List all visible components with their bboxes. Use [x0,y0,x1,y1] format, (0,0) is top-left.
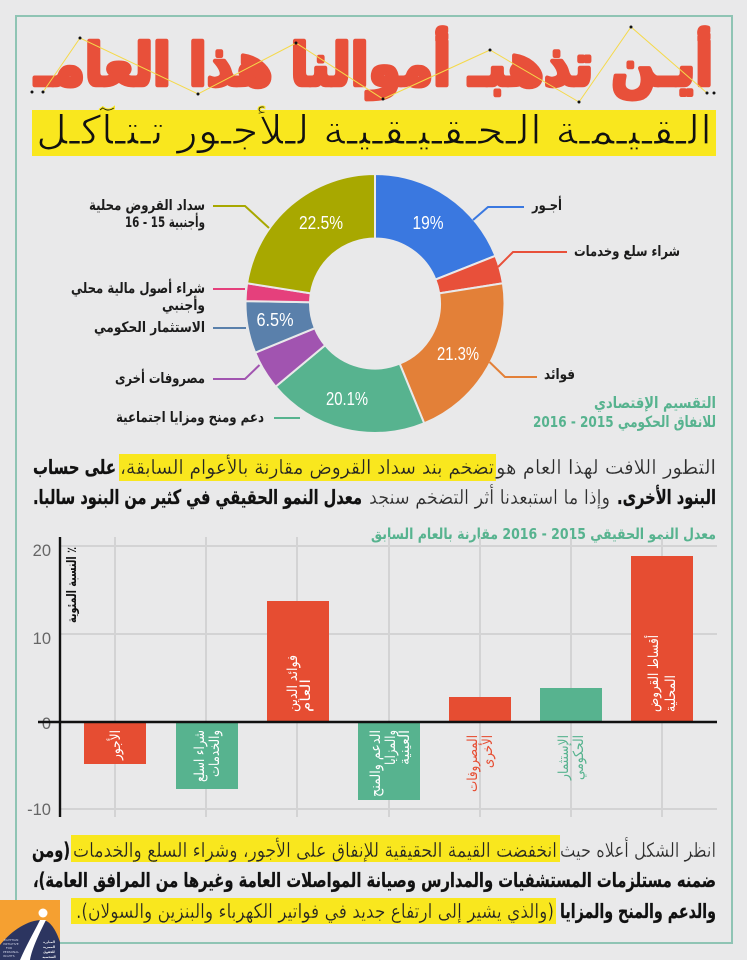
bar labels: والخدمات [207,730,223,777]
logo text: PERSONAL [3,950,19,954]
donut caption: التقسيم الإقتصادي [594,394,716,413]
bar labels: الإستثمار [556,735,572,781]
paragraph: debt repayment growth: معدل النمو الحقيقي في كثير من البنود سالبا. [33,485,362,510]
leader lines [213,206,567,418]
donut percentages: 22.5% [299,213,343,233]
y axis labels: 10 [33,630,51,648]
y axis labels [27,542,51,819]
logo text: RIGHTS [3,954,15,958]
logo text: المبادرة [43,940,55,944]
bar labels: العينية [397,730,413,765]
segment: interest [400,283,505,423]
donut percentages: 19% [412,213,444,233]
bar labels: أقساط القروض [644,635,662,712]
y axis labels: 0 [42,715,51,733]
donut labels [71,196,680,426]
paragraph: real spending decline: (والذي يشير إلى ارتفاع جديد في فواتير الكهرباء والبنزين والسولان). [76,899,554,924]
logo text: الشخصية [42,955,56,959]
segment: subsidies [276,345,424,433]
bar: other expenses [449,697,511,722]
donut labels: مصروفات أخرى [115,369,205,387]
bar: subsidies [358,722,420,800]
bar labels: الأخرى [478,735,496,768]
paragraph: real spending decline [32,835,716,924]
title decoration: line with dots [30,26,716,104]
bar: investment [540,688,602,722]
donut labels: الاستثمار الحكومي [94,320,205,336]
y axis labels: -10 [27,801,51,819]
logo text: INITIATIVE [3,942,19,946]
logo [0,900,60,960]
y axis title: ٪ النسبة المئوية [65,547,80,623]
paragraph: real spending decline: (ومن [32,838,70,862]
bar labels: الحكومي [571,735,587,780]
bar chart [27,537,717,819]
donut labels: شراء أصول مالية محلي [71,279,205,297]
donut labels: دعم ومنح ومزايا اجتماعية [116,410,264,426]
bar: wages [84,722,146,764]
donut percentages [256,213,479,409]
bar labels: فوائد الدين [285,655,301,712]
paragraph: debt repayment growth: التطور اللافت لهذا العام هو [495,455,716,479]
donut labels: فوائد [544,367,575,383]
paragraph: real spending decline: انظر الشكل أعلاه حيث [560,837,716,862]
donut chart [246,174,505,433]
bar labels [106,635,679,797]
donut percentages: 6.5% [256,310,294,330]
axes [38,537,717,817]
bar: domestic loan installments [631,556,693,722]
donut percentages: 21.3% [437,344,479,364]
bar labels: الأجور [106,730,124,761]
paragraph: real spending decline: انخفضت القيمة الحقيقية للإنفاق على الأجور، وشراء السلع والخدمات [73,838,557,862]
bar: debt interest [267,601,329,722]
bar labels: العام [298,679,314,712]
segment: debt repayment [247,174,375,293]
logo text: FOR [6,946,12,950]
bar labels: الدعم والمنح [368,730,384,797]
bar: goods and services [176,722,238,789]
logo text: للحقوق [43,950,55,954]
paragraph: debt repayment growth [33,454,716,510]
donut labels: أجـور [531,196,562,214]
paragraph: debt repayment growth: على حساب [33,455,116,479]
bar labels: المحلية [663,675,679,712]
donut caption [533,394,716,432]
y axis labels: 20 [33,542,51,560]
paragraph: debt repayment growth: تضخم بند سداد القروض مقارنة بالأعوام السابقة، [120,455,494,479]
donut labels: وأجنبي [162,296,205,314]
paragraph: debt repayment growth: وإذا ما استبعدنا أثر التضخم سنجد [369,484,610,510]
logo text: EGYPTIAN [4,938,18,942]
logo text: المصرية [43,945,55,949]
segment: financial assets [246,283,311,302]
bar labels: والمزايا [383,730,399,765]
segment: government investment [246,301,315,353]
logo text [3,938,56,959]
segment: other expenses [255,328,325,387]
bar labels: المصروفات [465,735,481,792]
bar labels: شراء اسلع [192,730,208,782]
donut labels: وأجنبية 15 - 16 [125,213,205,231]
bar chart title: معدل النمو الحقيقي 2015 - 2016 مقارنة بالعام السابق [371,525,716,543]
segment: wages [375,174,495,280]
donut labels: سداد القروض محلية [89,198,205,214]
subtitle band: الـقـيـمـة الـحـقـيـقـيـة لـلأجـور تـتـآكـل [36,105,712,154]
segment: goods and services [435,256,503,293]
donut percentages: 20.1% [326,389,368,409]
donut labels: شراء سلع وخدمات [574,244,680,260]
donut caption: للانفاق الحكومي 2015 - 2016 [533,413,716,432]
